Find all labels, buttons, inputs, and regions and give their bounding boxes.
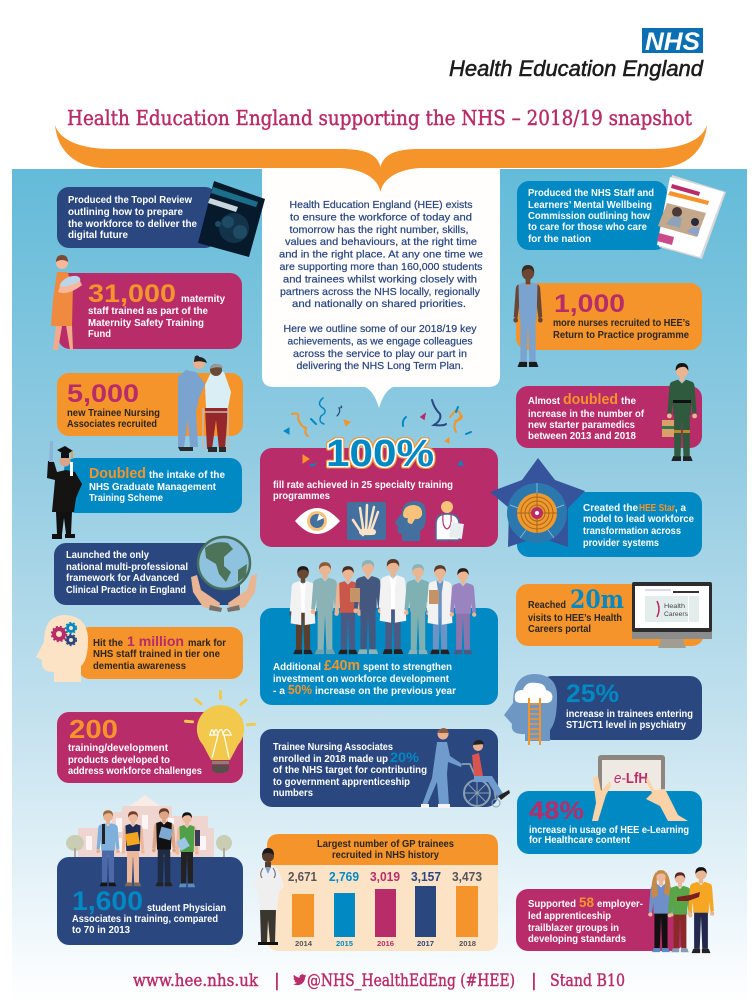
stand number: Stand B10 — [550, 971, 625, 991]
panel: Doubled Graduate Management Training Scheme: the intake of the — [149, 470, 225, 481]
intro paragraph: tomorrow has the right number, skills, — [290, 224, 468, 236]
panel: 20m Health Careers portal: Careers portal — [528, 624, 591, 635]
panel: Doubled Graduate Management Training Scheme: Training Scheme — [89, 493, 163, 504]
panel: Advanced Clinical Practice framework: national multi-professional — [66, 562, 188, 573]
footer links: | — [531, 971, 537, 991]
intro paragraph: to ensure the workforce of today and — [290, 211, 472, 223]
panel: 200 training products: address workforce challenges — [68, 766, 202, 777]
bar 2018 — [452, 870, 482, 948]
panel: 58 trailblazer groups: 58 — [579, 894, 594, 910]
icon: head with gears — [36, 615, 88, 682]
panel: 1,000 nurses — [513, 265, 702, 367]
icon: tablet showing e-LfH — [598, 755, 665, 803]
icon: doctor with chart — [436, 501, 464, 540]
icon: mother with baby — [51, 255, 83, 350]
panel: 5,000 Trainee Nursing Associates: 5,000 — [67, 380, 139, 408]
panel: 48% e-Learning: 48% — [529, 797, 584, 825]
panel: 1,600 Physician Associates: Associates in training, compared — [72, 914, 218, 925]
bar 2017: 2017 — [417, 939, 434, 948]
intro paragraph: values and behaviours, at the right time — [285, 236, 477, 248]
panel: Mental Wellbeing Commission: Produced the NHS Staff and — [528, 188, 654, 199]
intro paragraph — [279, 199, 483, 372]
panel: 48% e-Learning: for Healthcare content — [529, 835, 631, 846]
central intro panel — [262, 169, 500, 408]
panel: £40m workforce investment: 50% — [288, 682, 312, 697]
intro paragraph: are supporting more than 160,000 students — [280, 261, 482, 273]
panel: 200 training products: training/development — [68, 743, 169, 754]
panel: 25% psychiatry — [504, 674, 702, 745]
panel: 1,600 Physician Associates — [57, 795, 243, 945]
panel: 20m Health Careers portal: Reached — [528, 600, 566, 611]
panel: 1 million dementia awareness: 1 million — [127, 633, 184, 649]
bar 2015 — [329, 870, 359, 948]
panel: Advanced Clinical Practice framework — [54, 537, 257, 612]
NHS logo box: NHS — [645, 28, 700, 56]
panel: HEE Star: transformation across — [583, 526, 681, 537]
intro paragraph: and trainees whilst working closely with — [283, 273, 477, 285]
panel: 58 trailblazer groups: trailblazer groups in — [528, 923, 619, 934]
panel: 25% psychiatry: ST1/CT1 level in psychiatry — [566, 720, 686, 731]
panel: £40m workforce investment: increase on the previous year — [315, 686, 456, 697]
bar 2017: 3,157 — [411, 870, 441, 884]
intro paragraph: partners across the NHS locally, regionally — [280, 286, 481, 298]
icon: twitter bird — [293, 974, 306, 985]
title: Health Education England supporting the NHS – 2018/19 snapshot — [67, 106, 693, 130]
icon: graduate — [47, 441, 82, 539]
illustration: four students — [96, 808, 200, 887]
website: www.hee.nhs.uk — [133, 971, 259, 991]
illustration: three students reading — [648, 867, 714, 953]
icon: light bulb — [184, 690, 256, 773]
panel: 58 trailblazer groups: led apprenticeship — [528, 911, 611, 922]
panel: Almost doubled paramedics — [516, 363, 702, 461]
panel: 58 trailblazer groups — [516, 867, 714, 953]
bar 2015: 2015 — [336, 939, 353, 948]
icon: hands on tablet — [592, 776, 688, 821]
panel: £40m workforce investment: - a — [273, 686, 285, 697]
panel: Topol Review: the workforce to deliver the — [68, 219, 197, 230]
panel: £40m workforce investment: investment on workforce development — [273, 674, 450, 685]
panel: HEE Star: model to lead workforce — [583, 514, 694, 525]
icon: HEE star diagram — [490, 458, 585, 547]
footer links — [133, 971, 625, 991]
bar 2014: 2014 — [295, 939, 313, 948]
panel: Advanced Clinical Practice framework: framework for Advanced — [66, 573, 179, 584]
panel: HEE Star — [490, 458, 702, 557]
panel: HEE Star: Created the — [583, 503, 638, 514]
panel: 31,000 maternity staff: 31,000 — [88, 280, 176, 308]
panel: 31,000 maternity staff: staff trained as part of the — [88, 306, 208, 317]
panel: Trainee Nursing Associates 20% — [260, 728, 510, 808]
panel: 48% e-Learning — [517, 755, 702, 854]
panel: £40m workforce investment: Additional — [273, 662, 321, 673]
panel: Doubled Graduate Management Training Scheme: Doubled — [89, 465, 146, 482]
intro paragraph: and nationally on shared priorities. — [292, 298, 466, 310]
icon: doctor — [253, 848, 284, 945]
panel: Mental Wellbeing Commission: to care for those who care — [528, 222, 647, 233]
panel: Almost doubled paramedics: doubled — [563, 391, 618, 408]
panel: Trainee Nursing Associates 20%: of the NHS target for contributing — [273, 765, 427, 776]
panel: 20m Health Careers portal — [516, 582, 712, 648]
panel: 1 million dementia awareness: Hit the — [93, 638, 123, 649]
panel: Doubled Graduate Management Training Scheme — [47, 441, 242, 539]
panel: Almost doubled paramedics: increase in the number of — [528, 409, 645, 420]
panel: Topol Review: Produced the Topol Review — [68, 195, 192, 206]
panel: 1 million dementia awareness: mark for — [188, 638, 226, 649]
panel: Almost doubled paramedics: new starter paramedics — [528, 420, 635, 431]
panel: Trainee Nursing Associates 20%: to government apprenticeship — [273, 777, 410, 788]
orange brace — [55, 125, 707, 192]
intro paragraph: delivering the NHS Long Term Plan. — [296, 360, 464, 372]
panel: 5,000 Trainee Nursing Associates: new Trainee Nursing — [67, 408, 160, 419]
panel: Mental Wellbeing Commission: for the nation — [528, 234, 591, 245]
bar 2016: 2016 — [377, 939, 394, 948]
panel: 100% fill rate — [260, 433, 498, 547]
icon: monitor showing Health Careers — [632, 582, 712, 648]
panel: Almost doubled paramedics: Almost — [528, 396, 561, 407]
bar chart — [288, 870, 482, 948]
panel: 5,000 Trainee Nursing Associates: Associates recruited — [67, 419, 157, 430]
panel: 5,000 Trainee Nursing Associates — [57, 356, 243, 452]
panel: £40m workforce investment: spent to strengthen — [363, 662, 452, 673]
panel: 1 million dementia awareness — [36, 615, 243, 682]
panel: £40m workforce investment: £40m — [324, 657, 360, 674]
icon: nurse — [513, 265, 543, 367]
panel: 31,000 maternity staff: maternity — [181, 294, 225, 305]
panel: 1 million dementia awareness: NHS staff trained in tier one — [93, 649, 220, 660]
panel: 25% psychiatry: 25% — [566, 680, 619, 708]
bar 2016 — [370, 870, 400, 948]
intro paragraph: and in the right place. At any one time we — [279, 249, 483, 261]
Health Education England wordmark: Health Education England — [449, 56, 704, 81]
panel: Advanced Clinical Practice framework: Clinical Practice in England — [66, 585, 186, 596]
icon: tablet showing e-LfH: e-LfH — [614, 770, 648, 787]
panel: 31,000 maternity staff: Maternity Safety Training — [88, 318, 204, 329]
bar 2017 — [411, 870, 441, 948]
panel: Topol Review: outlining how to prepare — [68, 207, 183, 218]
panel: 1,600 Physician Associates: 1,600 — [72, 886, 143, 916]
intro paragraph: across the service to play our part in — [293, 348, 467, 360]
panel: 1,000 nurses: more nurses recruited to HEE’s — [553, 318, 690, 329]
bar 2015: 2,769 — [329, 870, 359, 884]
panel: 200 training products: products developed to — [68, 755, 170, 766]
icon: paramedic — [662, 363, 697, 461]
illustration: university building — [66, 795, 232, 866]
panel: 58 trailblazer groups: developing standards — [528, 934, 626, 945]
icon: globe in hands — [191, 537, 257, 612]
panel: Trainee Nursing Associates 20%: Trainee Nursing Associates — [273, 742, 393, 753]
icon: Topol report cover — [198, 181, 265, 257]
logo: NHS Health Education England — [449, 28, 704, 81]
intro paragraph: Health Education England (HEE) exists — [290, 199, 472, 211]
panel: Topol Review — [57, 181, 265, 257]
icon: monitor showing Health Careers: Careers — [664, 611, 689, 618]
panel: 1,600 Physician Associates: student Physician — [147, 903, 226, 914]
panel: 1,000 nurses: 1,000 — [554, 290, 625, 318]
icon: hand x-ray — [347, 502, 386, 540]
panel: GP trainee bar chart: Largest number of GP trainees — [317, 839, 454, 850]
panel: 100% fill rate: programmes — [273, 491, 330, 502]
twitter handle: @NHS_HealthEdEng (#HEE) — [307, 971, 515, 991]
icon: monitor showing Health Careers: Health — [664, 603, 685, 610]
icon: report booklet — [657, 175, 726, 259]
panel: 1 million dementia awareness: dementia awareness — [93, 661, 186, 672]
panel: 200 training products: 200 — [69, 714, 118, 744]
icon: head with brain — [395, 501, 426, 541]
panel: Mental Wellbeing Commission: Learners’ Mental Wellbeing — [528, 200, 652, 211]
footer links: | — [274, 971, 280, 991]
panel: 58 trailblazer groups: employer- — [597, 899, 643, 910]
panel: Doubled Graduate Management Training Scheme: NHS Graduate Management — [89, 482, 217, 493]
intro paragraph: achievements, as we engage colleagues — [288, 335, 472, 347]
panel: Advanced Clinical Practice framework: Launched the only — [66, 550, 149, 561]
panel: Mental Wellbeing Commission — [517, 175, 726, 259]
panel: Trainee Nursing Associates 20%: enrolled in 2018 made up — [273, 754, 388, 765]
bar 2014 — [288, 870, 317, 948]
panel: Trainee Nursing Associates 20%: numbers — [273, 788, 313, 799]
panel: GP trainee bar chart: recruited in NHS history — [332, 850, 439, 861]
panel: £40m workforce investment — [260, 559, 498, 705]
panel: GP trainee bar chart — [253, 834, 498, 951]
confetti — [284, 398, 471, 467]
panel: 48% e-Learning: increase in usage of HEE e-Learning — [529, 825, 689, 836]
bar 2018: 2018 — [459, 939, 476, 948]
panel: Mental Wellbeing Commission: Commission outlining how — [528, 211, 650, 222]
bar 2018: 3,473 — [452, 870, 482, 884]
panel: Trainee Nursing Associates 20%: 20% — [390, 749, 420, 765]
panel: 25% psychiatry: increase in trainees entering — [566, 709, 693, 720]
bar 2014: 2,671 — [288, 870, 317, 884]
icon: head with cloud and ladder — [504, 674, 557, 745]
intro paragraph: Here we outline some of our 2018/19 key — [284, 323, 477, 335]
panel: 1,000 nurses: Return to Practice programme — [553, 330, 689, 341]
panel: 31,000 maternity staff — [51, 255, 242, 350]
panel: 20m Health Careers portal: visits to HEE’s Health — [528, 613, 622, 624]
panel: Almost doubled paramedics: between 2013 and 2018 — [528, 431, 636, 442]
panel: 1,600 Physician Associates: to 70 in 2013 — [72, 925, 130, 936]
icon: nurse pushing wheelchair — [421, 728, 510, 808]
panel: HEE Star: HEE Star — [639, 503, 675, 514]
panel: 20m Health Careers portal: 20m — [570, 585, 624, 614]
panel: Topol Review: digital future — [68, 230, 128, 241]
illustration: team of health workers — [289, 559, 476, 654]
panel: 58 trailblazer groups: Supported — [528, 899, 576, 910]
panel: HEE Star: , a — [675, 503, 686, 514]
panel: Almost doubled paramedics: the — [621, 396, 636, 407]
panel: 100% fill rate: fill rate achieved in 25 specialty training — [273, 480, 453, 491]
panel: 200 training products — [57, 690, 256, 783]
big 100%: 100% — [326, 433, 434, 475]
bar 2016: 3,019 — [370, 870, 400, 884]
icon: nurse helping patient with walker — [178, 356, 231, 452]
icon: eye — [295, 508, 340, 534]
panel: 31,000 maternity staff: Fund — [88, 329, 111, 340]
panel: HEE Star: provider systems — [583, 538, 659, 549]
